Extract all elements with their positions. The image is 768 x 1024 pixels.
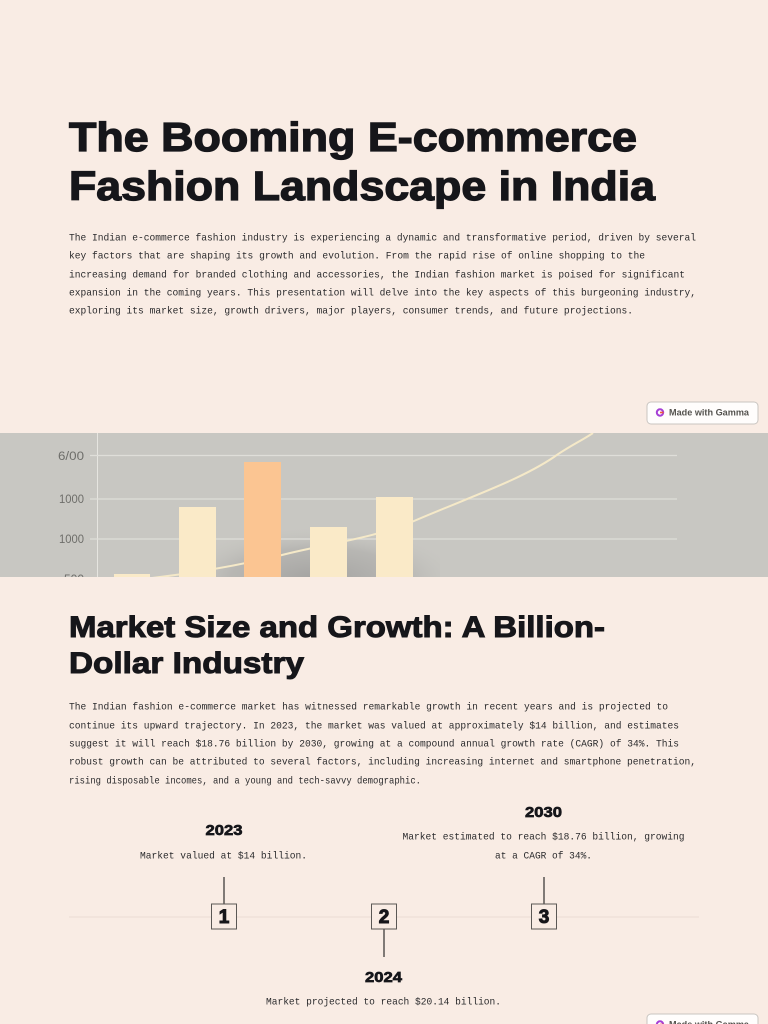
chart axis labels: 1000 — [59, 534, 84, 546]
market text block: rising disposable incomes, and a young and tech-savvy demographic. — [69, 776, 421, 788]
title: Fashion Landscape in India — [69, 163, 656, 209]
timeline item 2024: 2024 — [365, 969, 403, 986]
timeline item 2024 — [266, 904, 501, 1008]
intro text block: key factors that are shaping its growth and evolution. From the rapid rise of online shopping to the — [69, 250, 645, 262]
chart axis labels: 500 — [64, 574, 84, 586]
market text block: continue its upward trajectory. In 2023, the market was valued at approximately $14 billion, and estimates — [69, 720, 679, 732]
intro text block: The Indian e-commerce fashion industry is experiencing a dynamic and transformative period, driven by several — [69, 232, 696, 244]
market text block: suggest it will reach $18.76 billion by 2030, growing at a compound annual growth rate (CAGR) of 34%. This — [69, 738, 679, 750]
title — [69, 114, 656, 209]
timeline item 2023: Market valued at $14 billion. — [140, 850, 307, 862]
timeline item 2030: 2030 — [525, 804, 562, 821]
timeline item 2023 — [140, 822, 307, 929]
chart axis and gridlines — [90, 433, 677, 577]
timeline item 2030 — [402, 804, 684, 929]
title: The Booming E-commerce — [69, 114, 637, 160]
market text block: The Indian fashion e-commerce market has witnessed remarkable growth in recent years and is projected to — [69, 702, 668, 714]
growth curve — [152, 433, 593, 578]
heading: market size and growth: Dollar Industry — [69, 647, 304, 680]
timeline item 2024: Market projected to reach $20.14 billion. — [266, 996, 501, 1008]
bar chart — [114, 462, 413, 578]
badge: made with gamma — [647, 402, 758, 424]
heading: market size and growth: Market Size and Growth: A Billion- — [69, 611, 605, 644]
market text block — [69, 702, 696, 788]
intro text block: increasing demand for branded clothing and accessories, the Indian fashion market is poised for significant — [69, 270, 685, 282]
intro text block: expansion in the coming years. This presentation will delve into the key aspects of this burgeoning industry, — [69, 288, 696, 300]
intro text block — [69, 232, 696, 318]
timeline item 2024: 2 — [379, 907, 389, 928]
chart axis labels: 6/00 — [58, 451, 84, 463]
icon: gamma logo — [657, 1021, 664, 1024]
heading: market size and growth — [69, 611, 605, 680]
market text block: robust growth can be attributed to several factors, including increasing internet and smartphone penetration, — [69, 756, 696, 768]
badge: made with gamma, second page — [647, 1014, 758, 1024]
timeline — [69, 804, 699, 1008]
chart image banner — [0, 433, 768, 586]
badge: made with gamma: Made with Gamma — [669, 408, 750, 418]
chart axis labels: 1000 — [59, 494, 84, 506]
timeline item 2030: 3 — [539, 907, 549, 928]
intro text block: exploring its market size, growth drivers, major players, consumer trends, and future projections. — [69, 306, 633, 318]
chart axis labels — [58, 451, 84, 577]
timeline item 2030: at a CAGR of 34%. — [495, 850, 592, 862]
icon: gamma logo — [657, 409, 664, 416]
timeline item 2023: 2023 — [206, 822, 242, 839]
timeline item 2023: 1 — [219, 907, 230, 928]
timeline item 2030: Market estimated to reach $18.76 billion, growing — [402, 832, 684, 844]
